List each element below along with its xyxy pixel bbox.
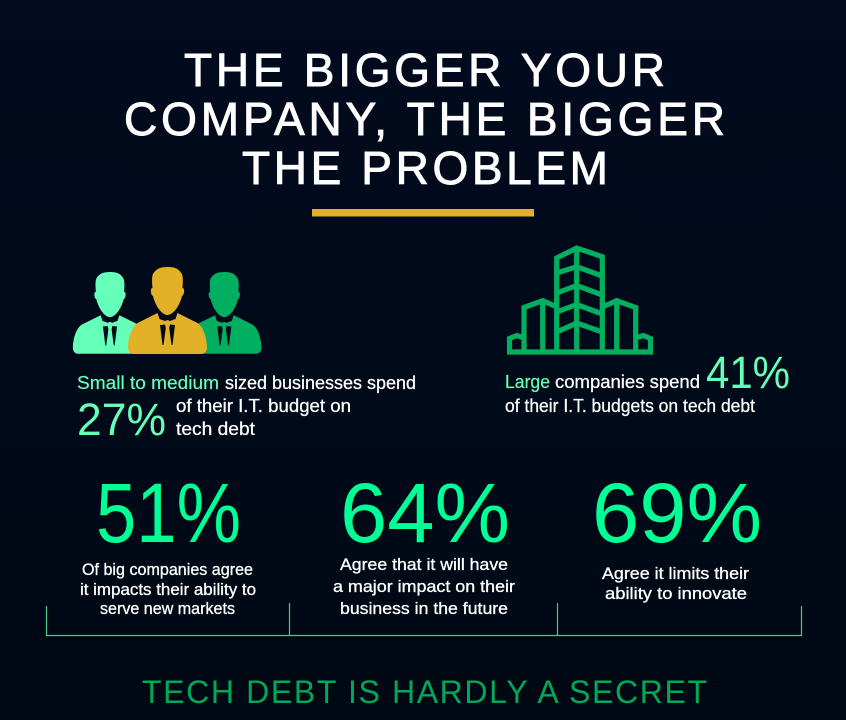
bracket line under stats — [46, 603, 802, 636]
text block: large companies: 41% — [706, 347, 790, 398]
stat: 69% — [592, 466, 762, 603]
stat: 69%: Agree it limits their — [602, 565, 750, 583]
stat: 69%: 69% — [592, 466, 762, 560]
stat: 64%: Agree that it will have — [340, 556, 508, 574]
stat: 51%: serve new markets — [100, 600, 235, 618]
text block: small to medium businesses — [77, 373, 416, 445]
stat: 51% — [80, 466, 256, 618]
stat: 64%: a major impact on their — [333, 578, 516, 596]
title: COMPANY, THE BIGGER — [124, 93, 725, 145]
section heading: TECH DEBT IS HARDLY A SECRET — [142, 674, 707, 710]
title: THE PROBLEM — [242, 142, 608, 194]
stat: 64% — [333, 466, 516, 618]
text block: small to medium businesses: of their I.T. budget on — [176, 396, 351, 416]
text block: large companies: companies spend — [555, 372, 700, 392]
stat: 69%: ability to innovate — [605, 585, 747, 603]
title underline bar — [312, 209, 534, 216]
stat: 51%: 51% — [96, 466, 241, 560]
text block: large companies: Large — [505, 372, 550, 392]
text block: small to medium businesses: sized businesses spend — [225, 373, 416, 393]
stat: 51%: it impacts their ability to — [80, 581, 256, 599]
text block: large companies — [505, 347, 790, 416]
text block: small to medium businesses: 27% — [77, 394, 166, 445]
text block: large companies: of their I.T. budgets on tech debt — [505, 396, 755, 416]
stat: 64%: business in the future — [340, 600, 508, 618]
text block: small to medium businesses: tech debt — [176, 419, 255, 439]
title — [124, 44, 725, 194]
stat: 51%: Of big companies agree — [82, 561, 253, 579]
icon: three business people — [73, 267, 261, 354]
text block: small to medium businesses: Small to medium — [77, 373, 219, 393]
title: THE BIGGER YOUR — [184, 44, 665, 96]
stat: 64%: 64% — [340, 466, 510, 560]
icon: office buildings — [507, 248, 653, 352]
